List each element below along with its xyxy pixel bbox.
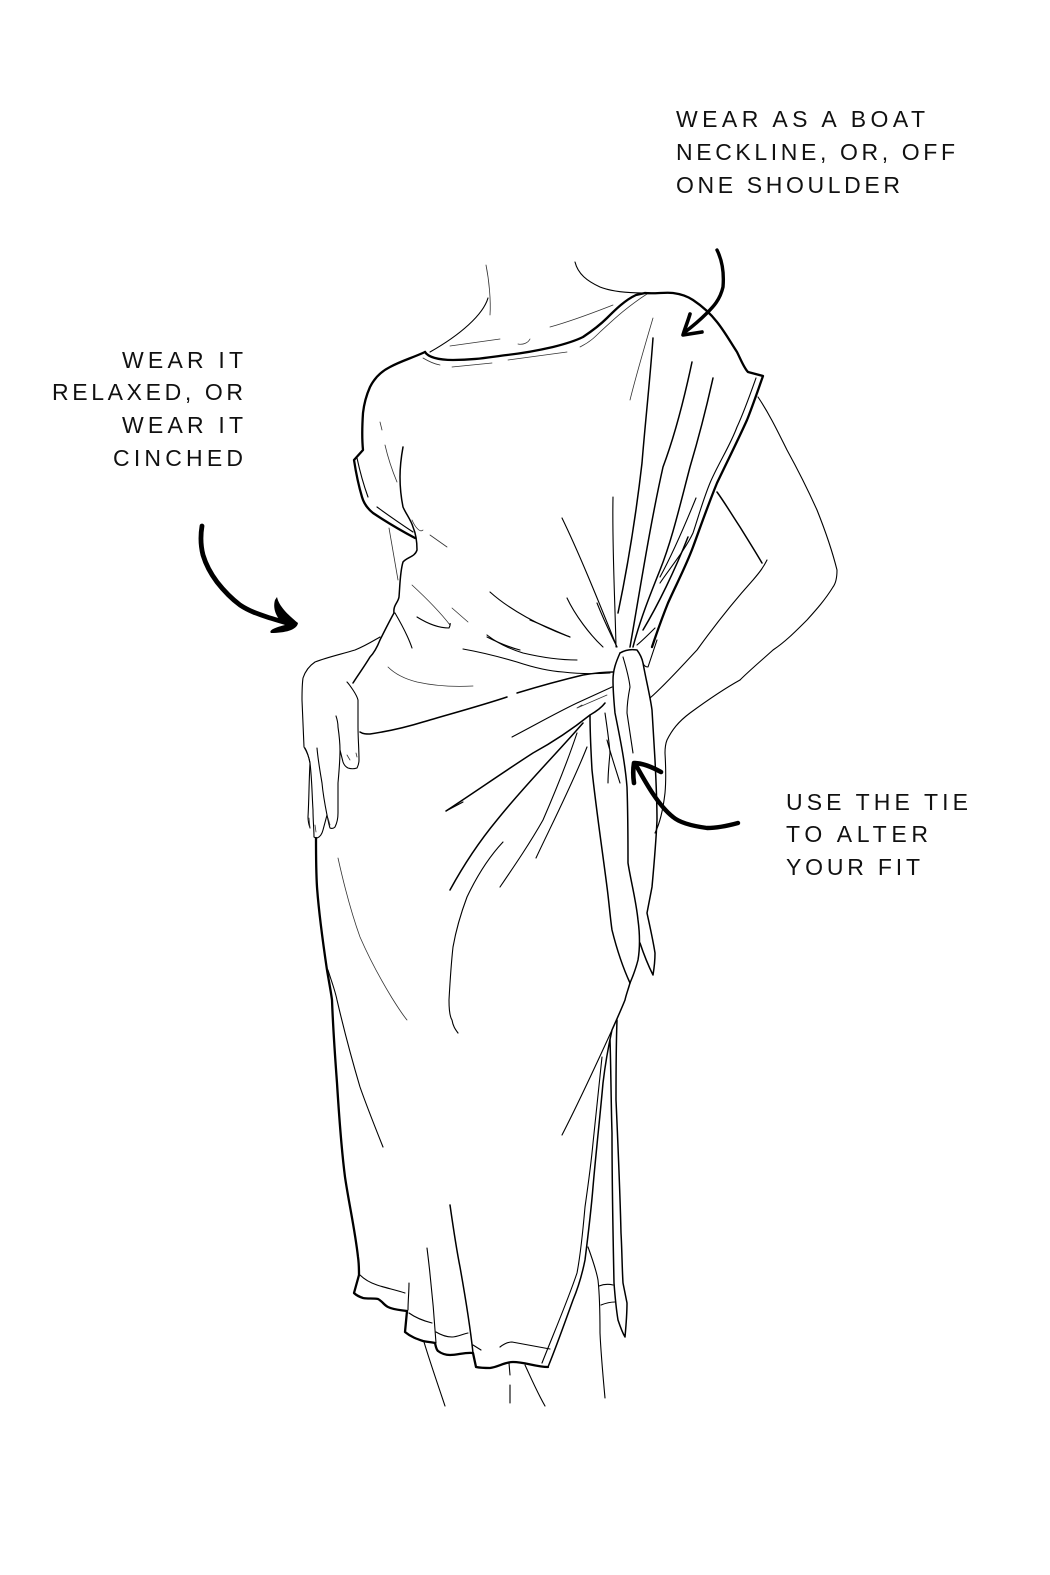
figure: skirt outline: [316, 838, 630, 1368]
arrow: to waist: [201, 526, 298, 633]
figure: hand on hip: [302, 637, 380, 838]
caption: neckline: ONE SHOULDER: [676, 172, 900, 198]
caption: relaxed or cinched: CINCHED: [113, 445, 243, 471]
figure: neckline: [423, 293, 647, 367]
caption: tie: USE THE TIE: [786, 789, 968, 815]
figure: slit tie end and legs: [424, 1020, 627, 1406]
caption: neckline: WEAR AS A BOAT: [676, 106, 925, 132]
figure: right arm: [650, 397, 837, 833]
figure: neck and chest: [430, 262, 645, 352]
caption: tie: TO ALTER: [786, 821, 928, 847]
arrow: to shoulder: [683, 250, 723, 335]
figure: dress top outline: [353, 293, 763, 683]
caption: relaxed or cinched: WEAR IT: [122, 347, 243, 373]
caption: neckline: [676, 106, 955, 198]
figure: bodice folds: [412, 318, 713, 650]
figure: tie knot: [590, 640, 657, 983]
caption: tie: YOUR FIT: [786, 854, 920, 880]
figure: waist and skirt folds: [338, 620, 613, 1033]
caption: relaxed or cinched: [52, 347, 243, 471]
caption: relaxed or cinched: RELAXED, OR: [52, 379, 243, 405]
arrow: to tie: [633, 763, 738, 828]
caption: tie: [786, 789, 968, 880]
caption: relaxed or cinched: WEAR IT: [122, 412, 243, 438]
caption: neckline: NECKLINE, OR, OFF: [676, 139, 955, 165]
